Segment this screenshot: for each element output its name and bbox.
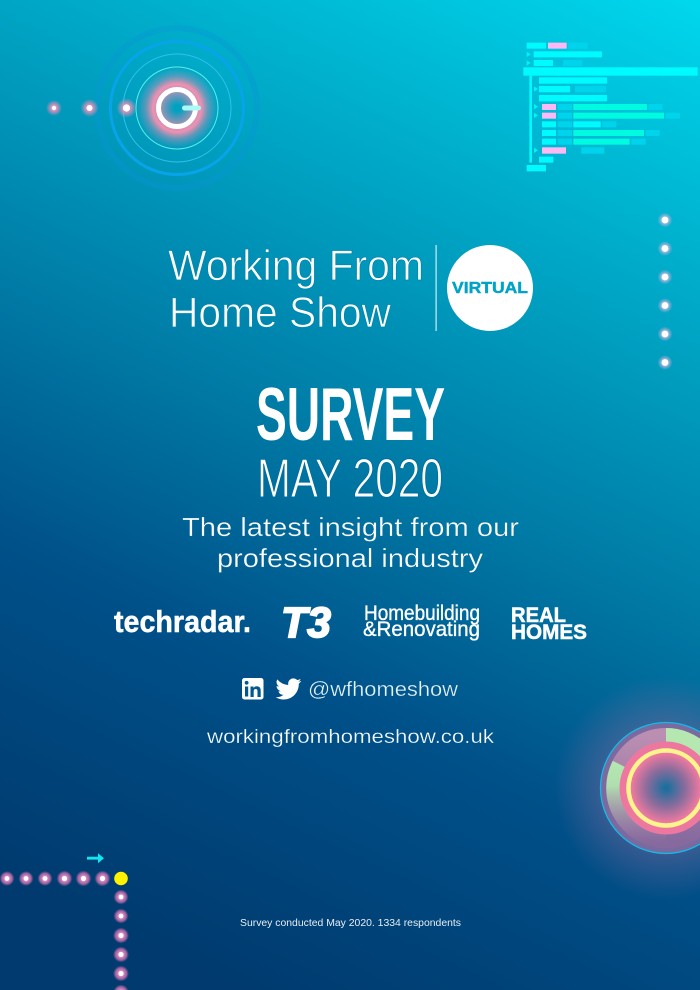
bottom-left dotted path (0, 870, 129, 990)
logo wordmark (168, 242, 424, 337)
icon: LinkedIn (242, 678, 264, 700)
icon: Twitter bird (276, 678, 301, 699)
footnote: Survey conducted May 2020. 1334 respondents (240, 918, 461, 929)
code block graphic (523, 43, 698, 171)
logo: Working From Home Show: VIRTUAL (452, 280, 528, 297)
logo: Homebuilding and Renovating: &Renovating (363, 618, 480, 641)
subheading: MAY 2020: MAY 2020 (257, 447, 443, 509)
logo: T3: T3 (281, 599, 331, 647)
logo: Homebuilding and Renovating (363, 602, 480, 641)
partner logos (114, 599, 587, 647)
logo: Homebuilding and Renovating: Homebuilding (364, 602, 480, 625)
website url: workingfromhomeshow.co.uk (206, 726, 494, 748)
tagline: The latest insight from our (182, 512, 519, 542)
logo: techradar: techradar. (114, 604, 251, 639)
icon: power button with concentric rings (46, 28, 257, 188)
logo: Real Homes: HOMES (511, 621, 587, 644)
heading: SURVEY: SURVEY (256, 372, 445, 456)
icon: glowing dial (554, 676, 700, 900)
logo: Real Homes (511, 604, 587, 644)
tagline: professional industry (217, 543, 483, 573)
social handle: @wfhomeshow (308, 679, 459, 701)
right vertical dots (658, 212, 672, 370)
logo: Working From Home Show (168, 242, 533, 337)
logo wordmark: Home Show (169, 289, 392, 337)
logo wordmark: Working From (168, 242, 424, 290)
logo: Real Homes: REAL (511, 604, 566, 627)
tagline (182, 512, 519, 573)
arrow (87, 853, 104, 863)
